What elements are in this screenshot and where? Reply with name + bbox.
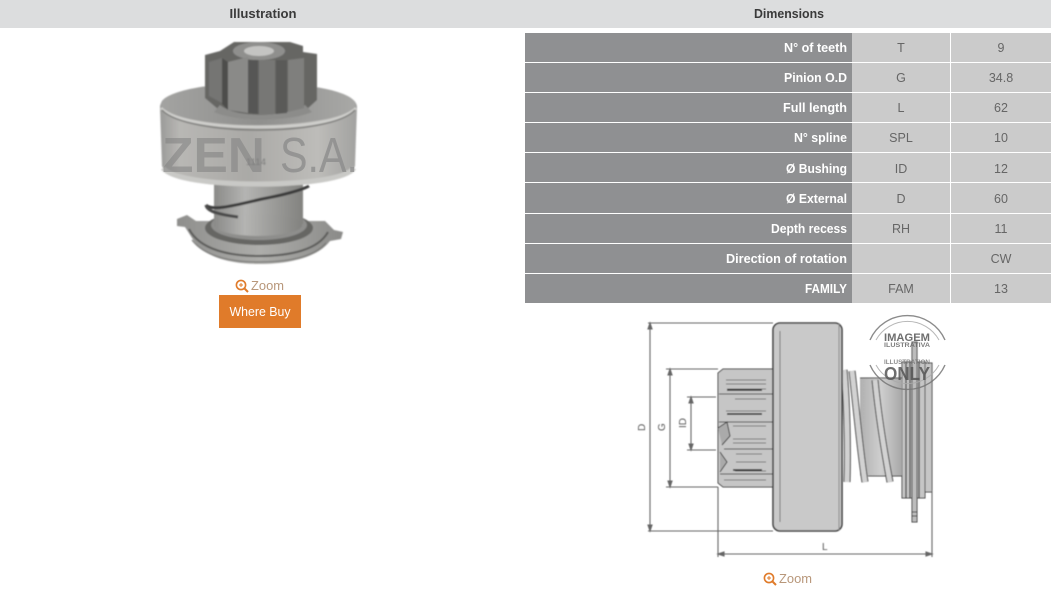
row: Ø Bushing: Ø Bushing: [786, 162, 847, 176]
stamp: illustrative image: ILLUSTRATION: [884, 360, 930, 366]
dimensions table: [525, 33, 1051, 303]
dimension lines: [648, 323, 932, 557]
stamp: illustrative image: ONLY: [884, 364, 930, 384]
zoom link: photo: [236, 279, 284, 293]
dimension labels: L: [822, 542, 828, 553]
row: Ø External: Ø External: [786, 192, 847, 206]
row: Full length: [525, 93, 1051, 122]
header: Illustration: [0, 0, 525, 28]
row: Ø External: 60: [994, 192, 1008, 206]
row: Depth recess: [525, 214, 1051, 243]
row: Depth recess: 11: [995, 222, 1008, 236]
drum body: [160, 83, 357, 187]
row: Ø Bushing: 12: [994, 162, 1008, 176]
watermark: ZEN S.A.: ZEN: [162, 129, 265, 183]
dimension labels: D: [637, 424, 648, 431]
header: Dimensions: [525, 0, 1051, 28]
row: N° of teeth: 9: [998, 41, 1005, 55]
row: Full length: 62: [994, 101, 1008, 115]
row: FAMILY: FAMILY: [805, 282, 848, 296]
row: N° spline: SPL: [889, 131, 913, 145]
row: N° of teeth: [525, 33, 1051, 62]
technical drawing: [637, 323, 932, 557]
row: Ø Bushing: [525, 153, 1051, 182]
icon: magnifier: [236, 280, 248, 292]
row: Pinion O.D: G: [896, 71, 906, 85]
dimension labels: ID: [678, 418, 689, 428]
watermark: ZEN S.A.: S.A.: [280, 129, 358, 183]
stamp: illustrative image: IMAGEM: [884, 332, 930, 344]
header: Dimensions: Dimensions: [754, 7, 824, 21]
watermark: ZEN S.A.: [162, 129, 358, 183]
zoom link: photo: Zoom: [251, 279, 284, 293]
engraved marks: 1114: [246, 157, 266, 167]
drum: [773, 323, 842, 531]
drive plates and pin: [902, 342, 932, 522]
row: FAMILY: 13: [994, 282, 1008, 296]
icon: magnifier: [764, 573, 776, 585]
row: Direction of rotation: Direction of rotation: [726, 252, 847, 266]
pinion teeth: [718, 369, 773, 487]
row: Direction of rotation: CW: [991, 252, 1012, 266]
product photo: starter drive pinion: [160, 42, 357, 264]
row: Full length: L: [898, 101, 905, 115]
row: Pinion O.D: 34.8: [989, 71, 1013, 85]
row: N° of teeth: T: [897, 41, 905, 55]
row: N° spline: 10: [994, 131, 1008, 145]
row: Full length: Full length: [783, 101, 847, 115]
button: Where Buy: [219, 295, 301, 328]
zoom link: drawing: Zoom: [779, 572, 812, 586]
row: Direction of rotation: [525, 244, 1051, 273]
row: FAMILY: [525, 274, 1051, 303]
row: N° of teeth: N° of teeth: [784, 41, 847, 55]
row: Ø External: [525, 183, 1051, 213]
row: Pinion O.D: Pinion O.D: [784, 71, 847, 85]
dimension labels: G: [657, 423, 668, 431]
row: Depth recess: Depth recess: [771, 222, 847, 236]
button: Where Buy: Where Buy: [230, 305, 291, 319]
row: Ø Bushing: ID: [895, 162, 907, 176]
row: Depth recess: RH: [892, 222, 910, 236]
header: Illustration: Illustration: [230, 7, 296, 21]
dimension labels: [637, 418, 828, 553]
row: FAMILY: FAM: [888, 282, 914, 296]
stamp: illustrative image: ILUSTRATIVA: [884, 342, 930, 349]
pinion teeth: [205, 42, 317, 120]
stamp: illustrative image: [870, 316, 945, 389]
flange with tabs: [177, 210, 343, 264]
row: N° spline: [525, 123, 1051, 152]
shaft and spring: [844, 370, 902, 482]
zoom link: drawing: [764, 572, 812, 586]
row: Ø External: D: [896, 192, 906, 206]
row: Pinion O.D: [525, 63, 1051, 92]
row: N° spline: N° spline: [794, 131, 847, 145]
shaft and spring: [206, 180, 309, 236]
